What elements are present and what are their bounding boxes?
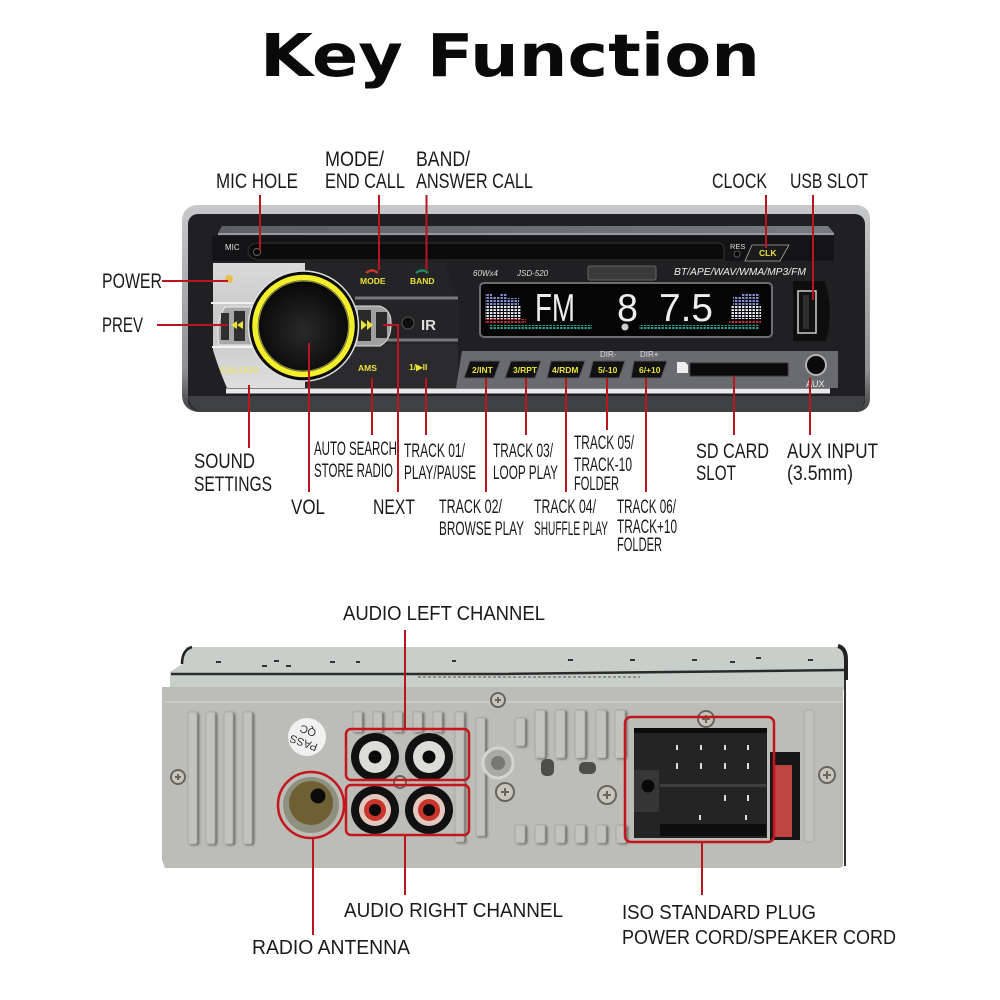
label: mode / end call: END CALL	[325, 170, 405, 193]
format list: BT/APE/WAV/WMA/MP3/FM	[674, 266, 806, 278]
label: track 03: TRACK 03/	[493, 441, 553, 462]
IR sensor	[402, 317, 436, 334]
label: track 05	[574, 433, 634, 495]
label: clock: CLOCK	[712, 170, 767, 193]
label: track 04: SHUFFLE PLAY	[534, 519, 608, 540]
lower button strip	[456, 351, 838, 388]
label: track 04: TRACK 04/	[534, 497, 596, 518]
label: track 06: TRACK 06/	[617, 497, 676, 518]
label: track 05: TRACK 05/	[574, 433, 634, 454]
ISO connector	[634, 728, 767, 838]
label: mode / end call: MODE/	[325, 148, 384, 171]
numbered buttons: 4/RDM	[552, 365, 578, 375]
PASS QC sticker: PASS	[288, 732, 319, 753]
label: track 02	[439, 497, 524, 540]
numbered buttons: 6/+10	[639, 365, 661, 375]
SD card slot	[677, 362, 788, 376]
right vent	[804, 710, 814, 842]
CLK button: CLK	[759, 248, 777, 258]
MIC label: MIC	[225, 243, 240, 252]
label: aux input: AUX INPUT	[787, 440, 878, 463]
screws	[171, 693, 835, 804]
label: vol: VOL	[291, 496, 325, 519]
right spectrum	[639, 293, 761, 330]
EQ button label: EQ/LOUD	[220, 365, 259, 375]
fuse	[770, 752, 800, 840]
left spectrum	[485, 293, 592, 330]
LCD display: 7.5	[659, 287, 713, 330]
label: audio left channel: AUDIO LEFT CHANNEL	[343, 603, 545, 625]
front panel of the car stereo: DIR+	[640, 350, 659, 359]
right channel box	[346, 785, 469, 835]
label: sd card slot: SLOT	[696, 462, 736, 485]
label: track 02: BROWSE PLAY	[439, 519, 524, 540]
AUX jack: AUX	[806, 379, 825, 389]
label: auto search store radio: STORE RADIO	[314, 461, 393, 482]
label: band / answer call	[416, 148, 533, 193]
label: sound settings	[194, 450, 272, 496]
IR sensor: IR	[421, 317, 436, 334]
label: usb slot: USB SLOT	[790, 170, 868, 193]
label: track 01: TRACK 01/	[404, 441, 465, 462]
label: prev: PREV	[102, 314, 143, 337]
label: power: POWER	[102, 270, 162, 293]
round hole and slots	[483, 748, 596, 778]
front panel of the car stereo: JSD-520	[516, 269, 549, 278]
RES label: RES	[730, 242, 745, 251]
DIR labels: DIR-	[600, 350, 617, 359]
label: next: NEXT	[373, 496, 415, 519]
numbered buttons: 3/RPT	[513, 365, 538, 375]
FM frequency readout: FM	[535, 287, 575, 330]
label: track 02: TRACK 02/	[439, 497, 502, 518]
AMS button: AMS	[358, 363, 377, 373]
power icon	[225, 275, 233, 283]
label: mic hole: MIC HOLE	[216, 170, 298, 193]
red highlight boxes on rear panel	[278, 630, 774, 935]
label: iso plug	[622, 902, 896, 949]
label: band / answer call: BAND/	[416, 148, 470, 171]
label: track 03	[493, 441, 558, 484]
label: sd card slot	[696, 440, 769, 485]
PASS QC sticker	[283, 713, 331, 761]
label: radio antenna: RADIO ANTENNA	[252, 937, 411, 959]
numbered buttons: 5/-10	[598, 365, 618, 375]
upper strip	[218, 226, 834, 233]
label: band / answer call: ANSWER CALL	[416, 170, 533, 193]
control cluster background	[300, 262, 458, 388]
model text: 60Wx4	[473, 269, 498, 278]
title: Key Function	[260, 21, 760, 90]
label: iso plug: ISO STANDARD PLUG	[622, 902, 816, 924]
BAND button: BAND	[410, 276, 435, 286]
lower centre vents	[515, 825, 626, 843]
silver frame	[182, 205, 870, 412]
label: sd card slot: SD CARD	[696, 440, 769, 463]
label: track 04	[534, 497, 608, 540]
BAND button	[410, 270, 435, 286]
label: track 05: TRACK-10	[574, 455, 632, 476]
label: aux input	[787, 440, 878, 485]
left channel box	[346, 729, 469, 780]
next rocker	[350, 306, 391, 346]
label: track 06: FOLDER	[617, 535, 662, 556]
left vents	[188, 712, 252, 844]
previous rocker	[218, 307, 260, 345]
PASS QC sticker: QC	[298, 722, 318, 738]
antenna socket	[283, 777, 339, 833]
USB slot	[793, 281, 830, 341]
antenna circle	[278, 772, 344, 838]
callout lines	[313, 630, 702, 935]
numbered buttons: 2/INT	[472, 365, 494, 375]
black faceplate	[188, 214, 865, 410]
top cover	[170, 647, 846, 690]
label: auto search store radio	[314, 439, 397, 482]
LCD display: 8	[617, 287, 638, 330]
MODE button	[360, 270, 386, 286]
label: auto search store radio: AUTO SEARCH	[314, 439, 397, 460]
small window	[588, 266, 656, 280]
red RCA jacks	[351, 786, 453, 834]
numbered buttons	[464, 361, 667, 378]
label: iso plug: POWER CORD/SPEAKER CORD	[622, 927, 896, 949]
rear panel of the car stereo	[162, 646, 846, 868]
label: track 01	[404, 441, 476, 484]
front panel of the car stereo	[182, 205, 870, 412]
MODE button: MODE	[360, 276, 386, 286]
mic hole and disc slot	[248, 243, 724, 260]
AUX jack	[806, 355, 826, 389]
silver left control block	[213, 263, 305, 388]
main grey plate	[162, 687, 843, 868]
label: track 06	[617, 497, 677, 556]
label: track 05: FOLDER	[574, 474, 619, 495]
label: track 03: LOOP PLAY	[493, 463, 558, 484]
ISO box	[625, 717, 774, 842]
play pause button: 1/▶II	[409, 362, 427, 372]
bottom highlight	[226, 388, 830, 394]
label: aux input: (3.5mm)	[787, 462, 853, 485]
LCD display	[480, 283, 772, 337]
label: mode / end call	[325, 148, 405, 193]
CLK button	[734, 245, 789, 261]
label: sound settings: SOUND	[194, 450, 255, 473]
label: track 01: PLAY/PAUSE	[404, 463, 476, 484]
callout lines for front panel	[157, 195, 813, 492]
white RCA jacks	[351, 733, 453, 781]
label: track 06: TRACK+10	[617, 517, 677, 538]
volume knob	[248, 271, 358, 381]
label: sound settings: SETTINGS	[194, 473, 272, 496]
upper centre vents	[353, 710, 625, 842]
label: audio right channel: AUDIO RIGHT CHANNEL	[344, 900, 563, 922]
